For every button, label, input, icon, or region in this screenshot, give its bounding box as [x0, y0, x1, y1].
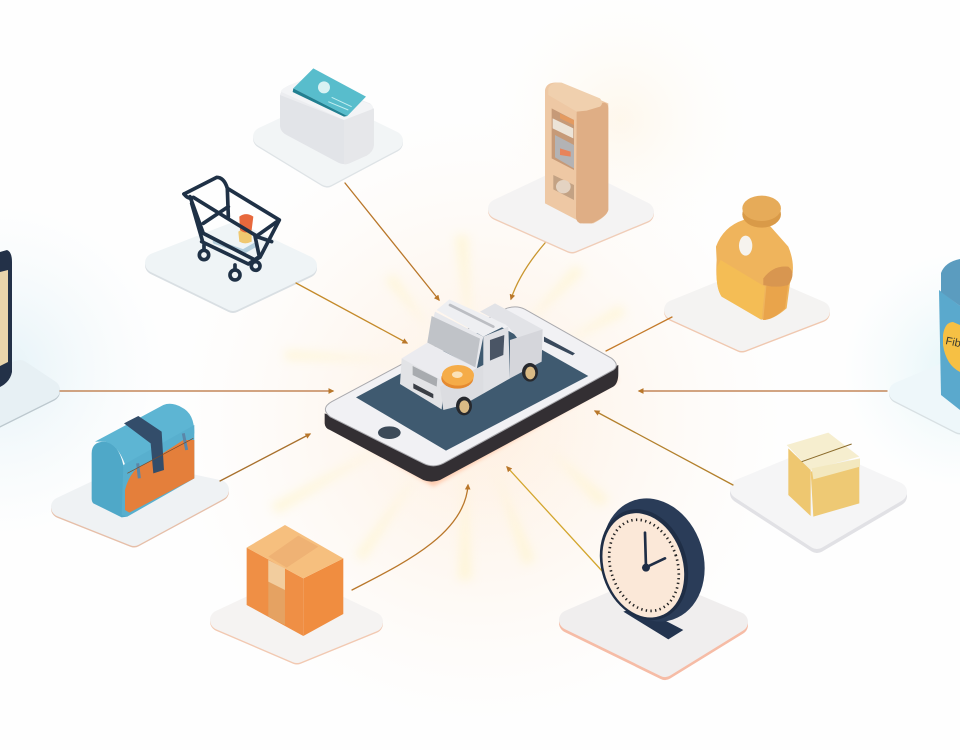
- platform: small parcel: [740, 457, 897, 543]
- icon: left smartphone: [0, 250, 12, 387]
- platform: right canister: [899, 360, 960, 424]
- arrow: card to phone: [345, 183, 439, 300]
- delivery truck: [400, 299, 543, 415]
- platform: clock: [569, 585, 738, 670]
- arrow: box to phone: [352, 485, 468, 590]
- arrow: cart to phone: [296, 283, 407, 343]
- arrow: left phone to phone: [60, 390, 333, 392]
- icon: orange cardboard box: [247, 525, 343, 636]
- platform: cardboard box: [220, 585, 373, 654]
- central phone and delivery truck: [325, 299, 618, 483]
- icon: yellow bottle: [716, 196, 793, 320]
- icon: blue canister with label: [939, 259, 960, 410]
- platform: shopping cart: [155, 232, 307, 303]
- light rays behind phone: [270, 235, 626, 580]
- arrow: tall package to phone: [511, 243, 545, 299]
- connector arrows: [60, 183, 887, 590]
- icon: payment card on white block: [280, 68, 374, 164]
- arrow: clock to phone: [507, 467, 603, 572]
- arrow: canister to phone: [639, 390, 887, 392]
- icon: desk clock: [586, 485, 720, 639]
- platform: bottle: [674, 280, 820, 342]
- arrow: parcel to phone: [595, 411, 733, 485]
- icon: toolbox: [92, 404, 194, 517]
- icon: small parcel: [787, 433, 860, 517]
- icon: tall beige package: [545, 83, 608, 223]
- phone body: [325, 307, 618, 482]
- icon: shopping cart: [184, 177, 279, 280]
- arrow: bottle to phone: [606, 317, 672, 351]
- platform: toolbox: [61, 472, 219, 538]
- arrow: toolbox to phone: [220, 434, 310, 481]
- platform: tall package: [498, 175, 644, 244]
- phone glow: [327, 378, 617, 483]
- platform: left phone: [0, 370, 50, 422]
- platform: payment card: [263, 108, 393, 178]
